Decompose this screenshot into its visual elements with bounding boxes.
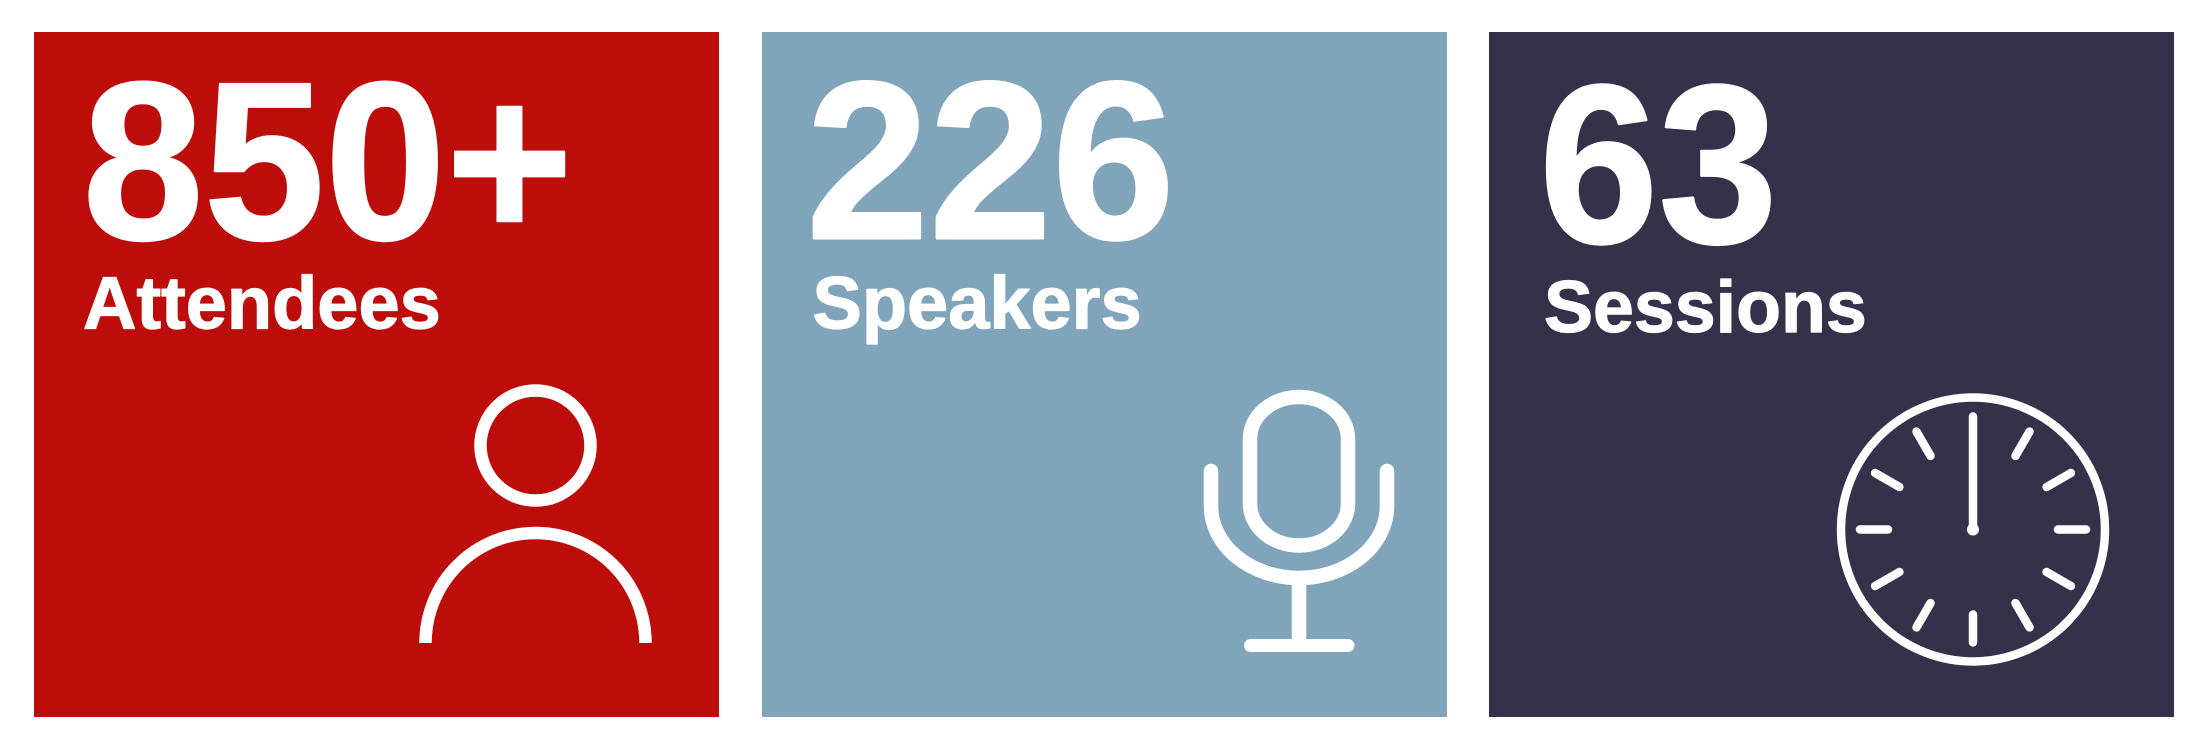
panel: sessions xyxy=(1489,32,2174,717)
panel background: red xyxy=(34,32,719,717)
label: Attendees: Attendees xyxy=(83,262,441,344)
icon: microphone xyxy=(1211,397,1387,646)
panel background: navy xyxy=(1489,32,2174,717)
label: Sessions: Sessions xyxy=(1544,265,1867,348)
panel: attendees xyxy=(34,32,719,717)
panel: speakers xyxy=(762,32,1447,717)
number: 226: 226 xyxy=(806,36,1175,287)
number: 63: 63 xyxy=(1539,37,1778,291)
panel background: blue xyxy=(762,32,1447,717)
number: 850+: 850+ xyxy=(82,35,573,287)
icon: clock xyxy=(1841,398,2105,662)
icon: person xyxy=(426,390,646,643)
label: Speakers: Speakers xyxy=(812,262,1142,344)
